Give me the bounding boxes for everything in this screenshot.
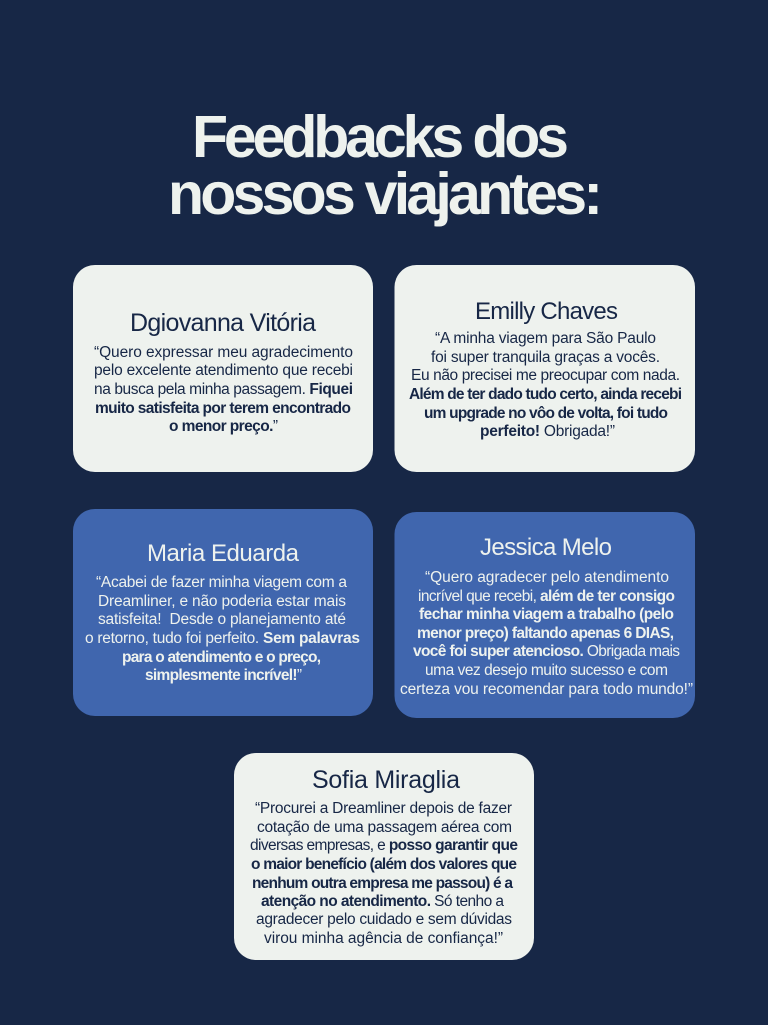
quote text <box>94 344 353 435</box>
title <box>168 104 603 227</box>
quote text: certeza vou recomendar para todo mundo!” <box>400 681 693 698</box>
quote text <box>85 574 360 684</box>
quote text: Eu não precisei me preocupar com nada. <box>411 367 680 384</box>
name: Jessica Melo <box>480 534 612 561</box>
quote text: fechar minha viagem a trabalho (pelo <box>419 606 674 623</box>
name: Sofia Miraglia <box>312 766 460 794</box>
quote text: cotação de uma passagem aérea com <box>257 819 512 836</box>
quote text <box>409 330 682 440</box>
quote text: uma vez desejo muito sucesso e com <box>425 662 668 679</box>
panel: testimonial Maria Eduarda <box>73 509 373 716</box>
name: Dgiovanna Vitória <box>130 309 316 337</box>
card background <box>73 265 373 472</box>
quote text: nenhum outra empresa me passou) é a <box>252 875 513 892</box>
quote text: Dreamliner, e não poderia estar mais <box>98 593 346 610</box>
card background <box>394 265 695 472</box>
quote text: agradecer pelo cuidado e sem dúvidas <box>256 911 512 928</box>
quote text: o menor preço.” <box>169 418 278 435</box>
quote text: “Acabei de fazer minha viagem com a <box>96 574 347 591</box>
quote text: na busca pela minha passagem. Fiquei <box>94 381 353 398</box>
card background <box>234 753 534 960</box>
quote text: “Procurei a Dreamliner depois de fazer <box>255 800 512 817</box>
quote text: “Quero expressar meu agradecimento <box>94 344 353 361</box>
quote text: o retorno, tudo foi perfeito. Sem palavras <box>85 630 360 647</box>
panel: testimonial Emilly Chaves <box>394 265 695 472</box>
quote text: o maior benefício (além dos valores que <box>251 856 517 873</box>
quote text: “Quero agradecer pelo atendimento <box>425 569 669 586</box>
quote text: atenção no atendimento. Só tenho a <box>261 893 504 910</box>
card background <box>73 509 373 716</box>
quote text: perfeito! Obrigada!” <box>480 423 615 440</box>
card background <box>394 512 695 718</box>
quote text: muito satisfeita por terem encontrado <box>95 400 351 417</box>
quote text: para o atendimento e o preço, <box>122 649 321 666</box>
panel: testimonial Dgiovanna Vitória <box>73 265 373 472</box>
quote text: simplesmente incrível!” <box>145 667 302 684</box>
quote text: você foi super atencioso. Obrigada mais <box>413 643 680 660</box>
panel: testimonial Jessica Melo <box>394 512 695 718</box>
quote text: diversas empresas, e posso garantir que <box>250 837 518 854</box>
quote text: foi super tranquila graças a vocês. <box>431 349 660 366</box>
quote text: satisfeita! Desde o planejamento até <box>98 611 346 628</box>
quote text: incrível que recebi, além de ter consigo <box>418 588 675 605</box>
title: Feedbacks dos <box>192 104 569 170</box>
quote text: Além de ter dado tudo certo, ainda recebi <box>409 386 682 403</box>
name: Maria Eduarda <box>147 540 300 567</box>
quote text: um upgrade no vôo de volta, foi tudo <box>424 405 668 422</box>
quote text: “A minha viagem para São Paulo <box>435 330 656 347</box>
quote text <box>400 569 693 698</box>
quote text <box>250 800 518 947</box>
quote text: pelo excelente atendimento que recebi <box>94 362 353 379</box>
title: nossos viajantes: <box>168 161 603 227</box>
quote text: menor preço) faltando apenas 6 DIAS, <box>417 625 674 642</box>
quote text: virou minha agência de confiança!” <box>264 930 503 947</box>
name: Emilly Chaves <box>475 298 618 325</box>
panel: testimonial Sofia Miraglia <box>234 753 534 960</box>
